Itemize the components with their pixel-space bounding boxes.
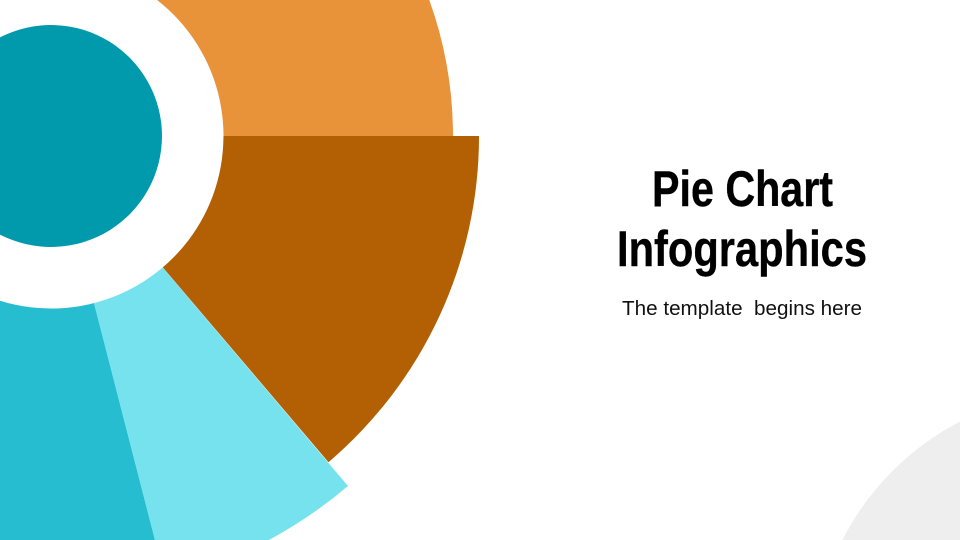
- pie chart: [0, 0, 479, 540]
- title line 2: Infographics: [617, 221, 867, 277]
- decorative grey circle, bottom right: [842, 421, 960, 540]
- pie segment: teal: [0, 136, 155, 540]
- dark teal centre circle: [0, 25, 162, 247]
- subtitle: The template begins here: [622, 298, 862, 320]
- pie segment: brown: [51, 136, 479, 462]
- pie segment: light blue: [51, 136, 348, 540]
- pie segment: orange: [51, 0, 453, 136]
- white centre ring: [0, 0, 224, 309]
- title: [617, 161, 867, 277]
- title line 1: Pie Chart: [652, 161, 833, 217]
